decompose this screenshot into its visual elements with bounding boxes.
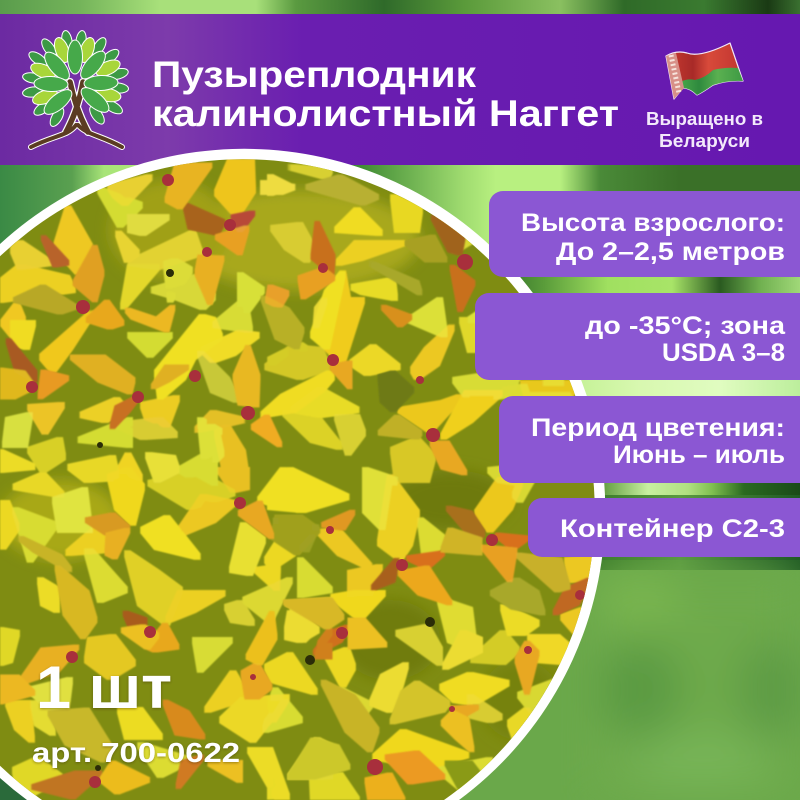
panel: frost hardiness: до -35°C; зона [585, 312, 786, 340]
title: калинолистный Наггет [152, 93, 619, 134]
title [152, 54, 619, 134]
panel: height: До 2–2,5 метров [556, 238, 785, 266]
dark gaps between leaves [95, 269, 435, 771]
shaded foliage base [0, 180, 560, 740]
panel: frost hardiness: USDA 3–8 [662, 339, 785, 367]
outer leaves [22, 30, 129, 129]
icon: flag of Belarus [666, 43, 743, 99]
trunk and roots [31, 82, 122, 147]
panel: height [489, 191, 800, 277]
caption: grown in Belarus: Беларуси [659, 131, 750, 151]
quantity label: 1 шт [36, 654, 172, 721]
red flower centres [26, 174, 585, 788]
logo: tree [22, 30, 129, 147]
panel: container: Контейнер С2-3 [560, 515, 785, 543]
main leaves [34, 40, 118, 119]
circular photo with white ring [0, 149, 610, 800]
panel: flowering period [499, 396, 800, 483]
panel: flowering period: Июнь – июль [613, 441, 785, 469]
panel: height: Высота взрослого: [521, 209, 785, 237]
title: Пузыреплодник [152, 54, 477, 95]
panel: container [528, 498, 800, 557]
article number: арт. 700-0622 [32, 737, 240, 768]
panel: flowering period: Период цветения: [531, 414, 785, 442]
yellow foliage layer [0, 162, 593, 800]
caption: grown in Belarus: Выращено в [646, 109, 763, 129]
panel: frost hardiness [475, 293, 800, 380]
caption: grown in Belarus [646, 109, 763, 151]
purple header band [0, 14, 800, 165]
orange, brown and olive leaves [0, 165, 590, 800]
light leaves [29, 36, 123, 108]
